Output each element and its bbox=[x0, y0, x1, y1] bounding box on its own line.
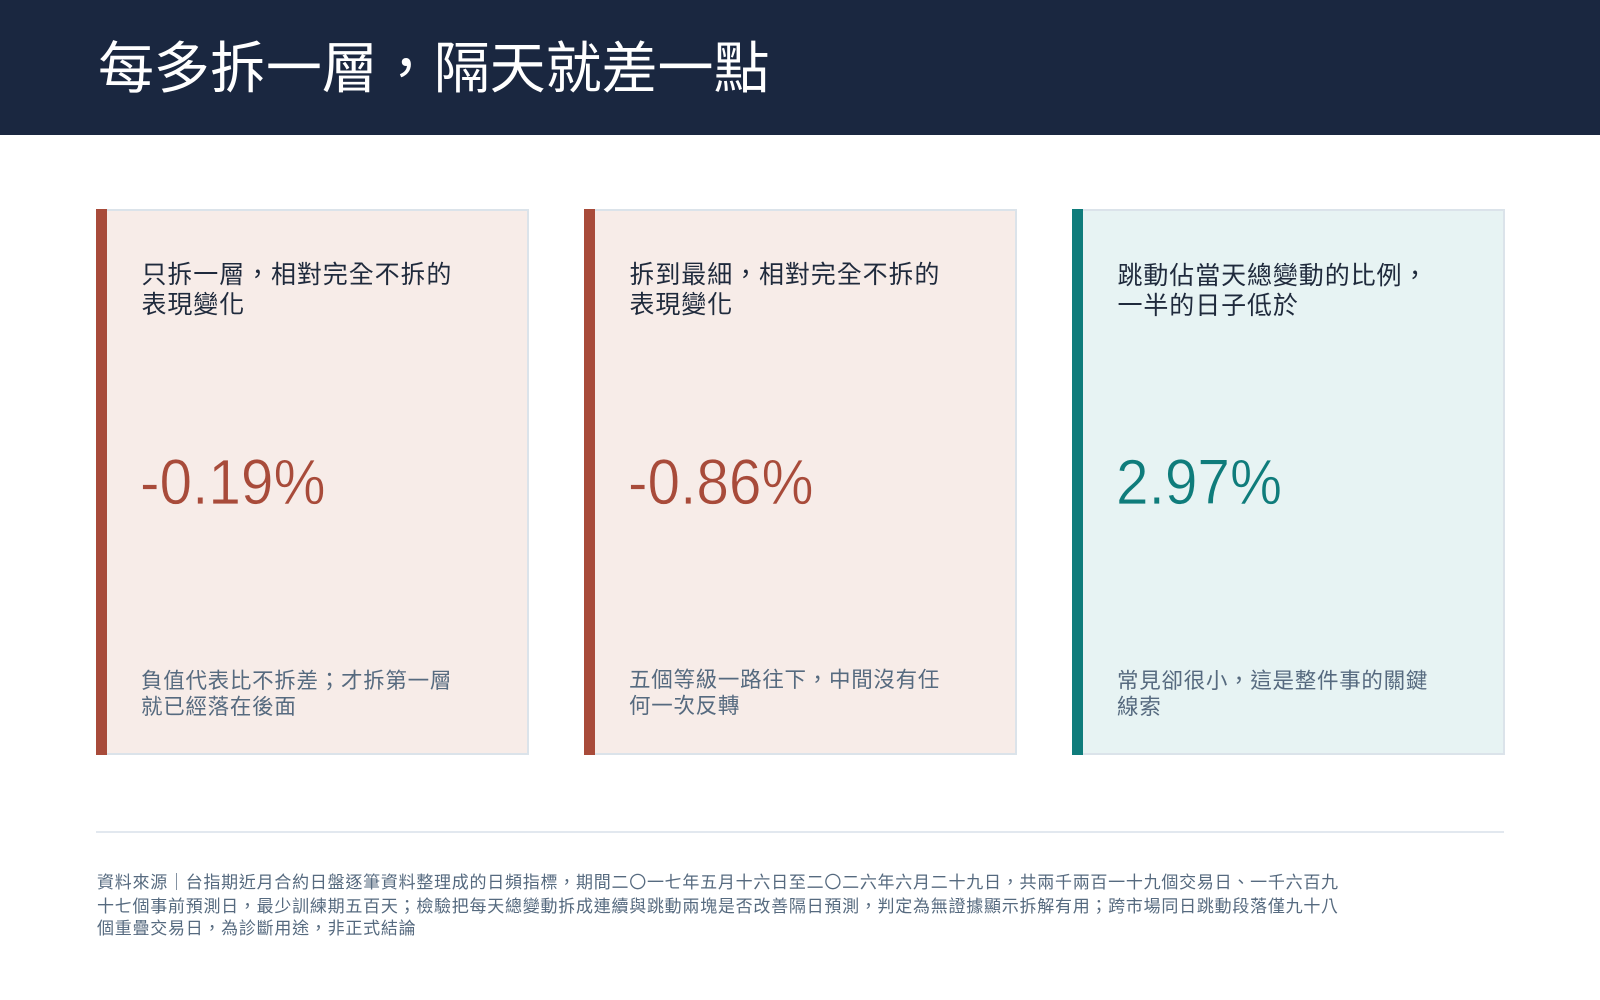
accent bar bbox=[584, 209, 595, 755]
panel: split one layer bbox=[96, 209, 529, 755]
accent bar bbox=[1072, 209, 1083, 755]
card heading bbox=[1118, 262, 1428, 320]
card note bbox=[629, 668, 940, 718]
source footnote: 資料來源｜台指期近月合約日盤逐筆資料整理成的日頻指標，期間二〇一七年五月十六日至二〇二六年六月二十九日，共兩千兩百一十九個交易日、一千六百九 bbox=[97, 873, 1339, 892]
card heading bbox=[630, 261, 940, 319]
card heading: 只拆一層，相對完全不拆的 bbox=[142, 261, 452, 289]
card note bbox=[1117, 669, 1428, 719]
card note: 五個等級一路往下，中間沒有任 bbox=[629, 668, 940, 692]
card heading: 表現變化 bbox=[142, 291, 245, 319]
header band bbox=[0, 0, 1600, 135]
title: 每多拆一層，隔天就差一點 bbox=[98, 36, 769, 100]
metric value: 2.97% bbox=[1116, 446, 1282, 518]
card note: 線索 bbox=[1117, 695, 1161, 719]
card heading bbox=[142, 261, 452, 319]
card note: 負值代表比不拆差；才拆第一層 bbox=[141, 669, 452, 693]
card note: 就已經落在後面 bbox=[141, 695, 297, 719]
panel: jump share bbox=[1072, 209, 1505, 755]
card note: 常見卻很小，這是整件事的關鍵 bbox=[1117, 669, 1428, 693]
source footnote: 個重疊交易日，為診斷用途，非正式結論 bbox=[97, 919, 416, 938]
card note: 何一次反轉 bbox=[629, 694, 740, 718]
card heading: 表現變化 bbox=[630, 291, 733, 319]
card note bbox=[141, 669, 452, 719]
panel: split to the finest bbox=[584, 209, 1017, 755]
card heading: 拆到最細，相對完全不拆的 bbox=[630, 261, 940, 289]
card heading: 跳動佔當天總變動的比例， bbox=[1118, 262, 1428, 290]
card heading: 一半的日子低於 bbox=[1118, 292, 1299, 320]
source footnote: 十七個事前預測日，最少訓練期五百天；檢驗把每天總變動拆成連續與跳動兩塊是否改善隔日預測，判定為無證據顯示拆解有用；跨市場同日跳動段落僅九十八 bbox=[97, 897, 1339, 916]
metric value: -0.19% bbox=[140, 446, 326, 518]
accent bar bbox=[96, 209, 107, 755]
source footnote bbox=[97, 873, 1339, 938]
metric value: -0.86% bbox=[628, 446, 814, 518]
